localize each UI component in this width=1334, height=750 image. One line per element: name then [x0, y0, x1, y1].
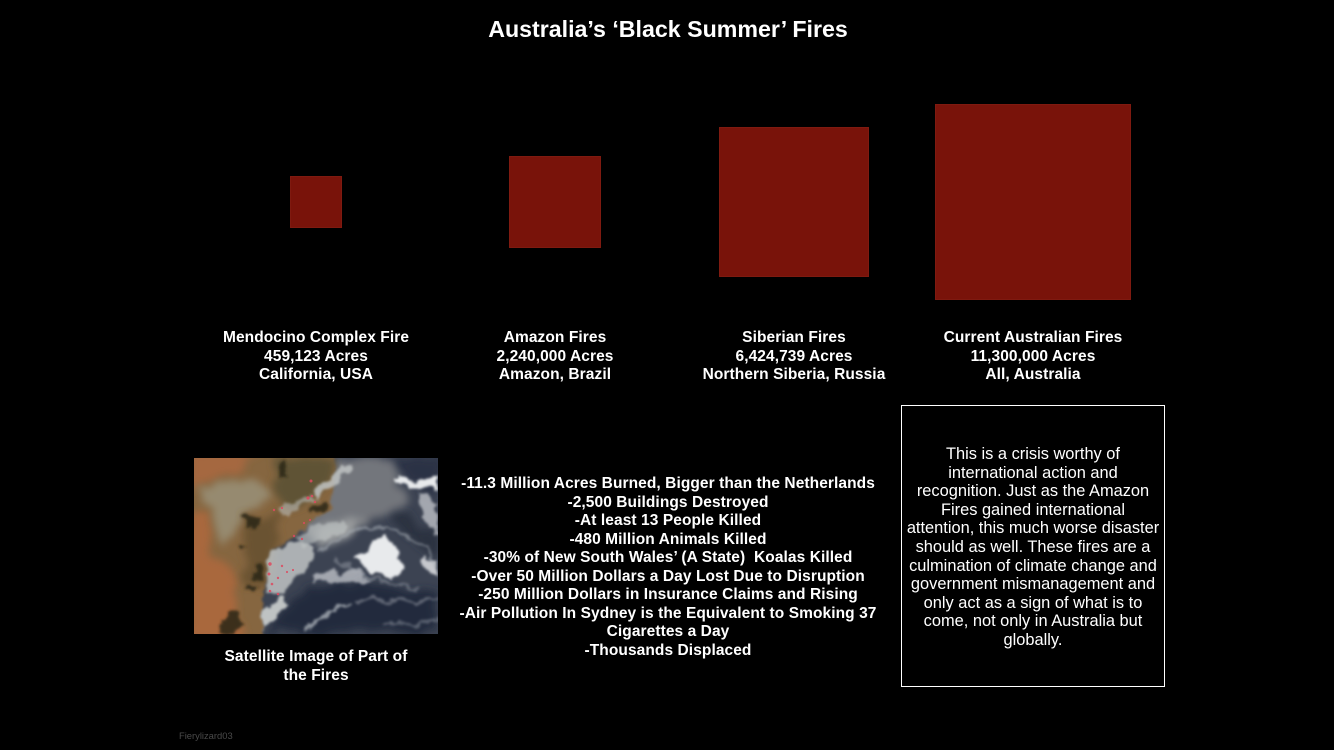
caption: Current Australian Fires: [944, 329, 1122, 383]
callout text: government mismanagement and: [911, 575, 1155, 593]
caption: satellite image: Satellite Image of Part of: [225, 648, 407, 665]
caption: Current Australian Fires: 11,300,000 Acres: [971, 348, 1095, 365]
title: Australia’s ‘Black Summer’ Fires: [488, 16, 848, 42]
callout text: Fires gained international: [941, 501, 1125, 519]
clouds: [312, 478, 438, 584]
caption: Siberian Fires: Northern Siberia, Russia: [703, 366, 885, 383]
cloud streaks: [304, 527, 438, 630]
caption: Current Australian Fires: Current Australian Fires: [944, 329, 1122, 346]
square: Siberian Fires: [719, 127, 869, 277]
list of impacts: -Thousands Displaced: [585, 642, 751, 659]
caption: Mendocino Complex Fire: [223, 329, 409, 383]
caption: Mendocino Complex Fire: California, USA: [259, 366, 373, 383]
callout text: come, not only in Australia but: [924, 612, 1142, 630]
satellite image of the fires: [194, 458, 438, 634]
callout text: culmination of climate change and: [909, 557, 1157, 575]
square: Current Australian Fires: [935, 104, 1131, 300]
callout box: [901, 405, 1165, 687]
dark burn scars: [218, 460, 328, 634]
caption: Amazon Fires: [496, 329, 613, 383]
caption: Mendocino Complex Fire: Mendocino Complex Fire: [223, 329, 409, 346]
square: Mendocino Complex Fire: [290, 176, 342, 228]
callout text: [907, 445, 1159, 649]
callout text: only act as a sign of what is to: [924, 594, 1142, 612]
caption: Amazon Fires: Amazon Fires: [504, 329, 606, 346]
caption: Amazon Fires: Amazon, Brazil: [499, 366, 611, 383]
caption: satellite image: [225, 648, 408, 684]
ocean: [260, 458, 438, 634]
callout text: globally.: [1004, 631, 1062, 649]
callout text: recognition. Just as the Amazon: [917, 482, 1149, 500]
list of impacts: Cigarettes a Day: [607, 623, 729, 640]
smoke plumes: [260, 464, 354, 628]
caption: Current Australian Fires: All, Australia: [985, 366, 1081, 383]
caption: Siberian Fires: 6,424,739 Acres: [736, 348, 852, 365]
list of impacts: -250 Million Dollars in Insurance Claims and Rising: [478, 586, 858, 603]
list of impacts: -Air Pollution In Sydney is the Equivalent to Smoking 37: [459, 605, 876, 622]
callout text: This is a crisis worthy of: [946, 445, 1120, 463]
caption: Mendocino Complex Fire: 459,123 Acres: [264, 348, 368, 365]
square: Amazon Fires: [509, 156, 601, 248]
list of impacts: -30% of New South Wales’ (A State) Koalas Killed: [484, 549, 852, 566]
caption: Amazon Fires: 2,240,000 Acres: [496, 348, 613, 365]
list of impacts: -2,500 Buildings Destroyed: [567, 494, 769, 511]
list of impacts: -11.3 Million Acres Burned, Bigger than the Netherlands: [461, 475, 875, 492]
caption: Siberian Fires: Siberian Fires: [742, 329, 846, 346]
list of impacts: -Over 50 Million Dollars a Day Lost Due to Disruption: [471, 568, 865, 585]
callout text: attention, this much worse disaster: [907, 519, 1159, 537]
credit: Fierylizard03: [179, 730, 233, 741]
caption: satellite image: the Fires: [283, 667, 349, 684]
land: [194, 458, 336, 634]
list of impacts: [459, 475, 876, 659]
callout text: international action and: [948, 464, 1118, 482]
caption: Siberian Fires: [703, 329, 886, 383]
smoke haze: [299, 458, 409, 543]
callout text: should as well. These fires are a: [916, 538, 1150, 556]
list of impacts: -480 Million Animals Killed: [569, 531, 767, 548]
list of impacts: -At least 13 People Killed: [575, 512, 761, 529]
fire hot spots: [268, 480, 316, 595]
